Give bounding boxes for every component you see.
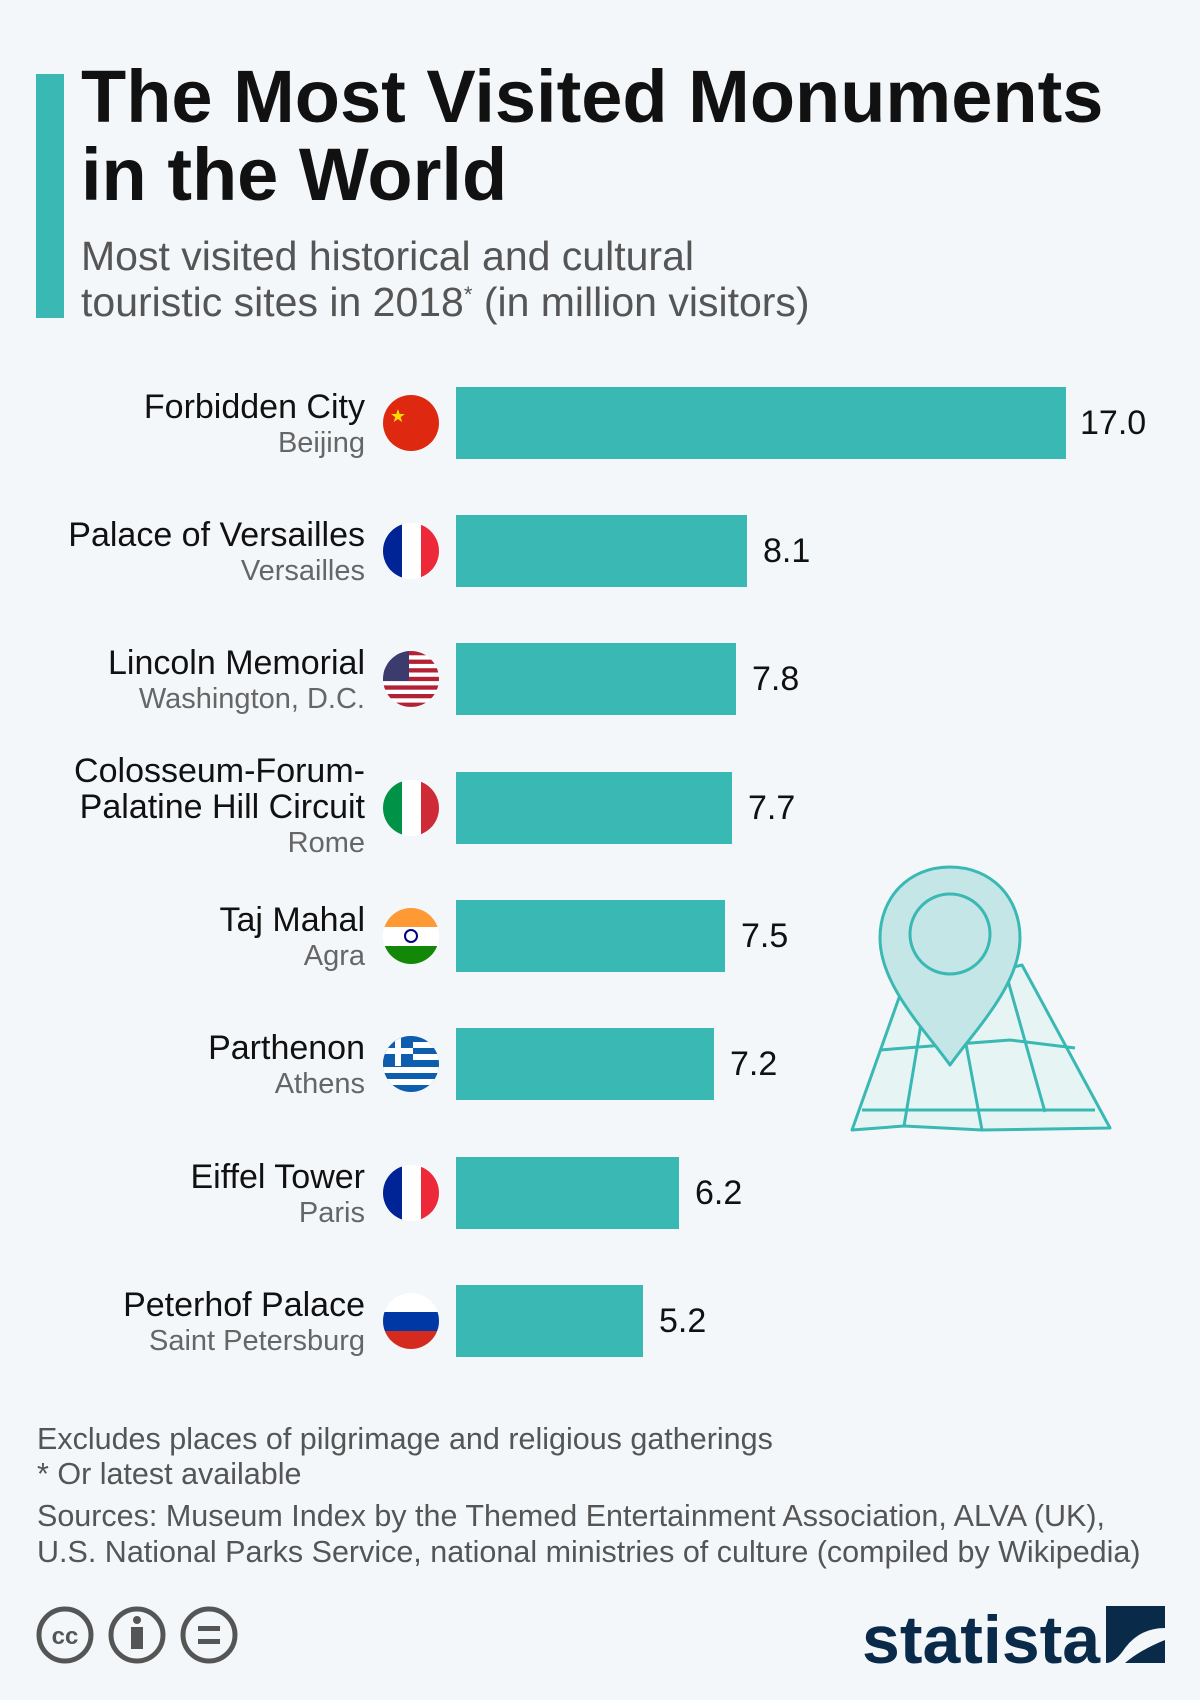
row: Lincoln Memorial: Lincoln Memorial (108, 644, 365, 682)
footer notes: * Or latest available (37, 1457, 301, 1491)
row: Eiffel Tower (190, 1157, 742, 1229)
row: Colosseum (76, 757, 794, 852)
row: Eiffel Tower: 6.2 (695, 1174, 742, 1212)
bar chart (68, 387, 1146, 1357)
row: Parthenon: Athens (275, 1068, 365, 1100)
row: Peterhof: 5.2 (659, 1302, 706, 1340)
row: Eiffel Tower: Paris (299, 1197, 365, 1229)
row: Versailles: 8.1 (763, 532, 810, 570)
row: Versailles: Versailles (241, 555, 365, 587)
row: Lincoln Memorial: 7.8 (752, 660, 799, 698)
row: Lincoln Memorial (108, 643, 799, 715)
row: Colosseum: Rome (288, 827, 365, 859)
footer notes: U.S. National Parks Service, national ministries of culture (compiled by Wikipedia) (37, 1535, 1141, 1569)
subtitle: * (464, 282, 473, 307)
footer notes: Sources: Museum Index by the Themed Entertainment Association, ALVA (UK), (37, 1499, 1105, 1533)
subtitle (81, 233, 810, 325)
row: Forbidden City: Forbidden City (144, 388, 365, 426)
title accent bar (36, 74, 64, 318)
row: Taj Mahal: Taj Mahal (219, 901, 365, 939)
row: Forbidden City: ★ (390, 406, 406, 426)
row: Forbidden City: Beijing (278, 427, 365, 459)
title: in the World (81, 133, 507, 216)
subtitle: touristic sites in 2018 (81, 279, 464, 325)
statista logo: statista (862, 1602, 1101, 1678)
title: The Most Visited Monuments (81, 55, 1103, 138)
row: Versailles: Palace of Versailles (68, 516, 365, 554)
row: Peterhof (123, 1285, 706, 1357)
row: Colosseum: Colosseum-Forum- (74, 752, 365, 790)
subtitle: (in million visitors) (472, 279, 810, 325)
row: Colosseum: Palatine Hill Circuit (80, 788, 366, 826)
license icons: cc (52, 1623, 78, 1650)
row: Parthenon: 7.2 (730, 1045, 777, 1083)
license icons (39, 1609, 235, 1661)
row: Taj Mahal: 7.5 (741, 917, 788, 955)
title (81, 55, 1103, 216)
row: Lincoln Memorial: Washington, D.C. (139, 683, 365, 715)
row: Colosseum: 7.7 (748, 789, 795, 827)
row: Taj Mahal (219, 900, 788, 972)
footer notes: Excludes places of pilgrimage and religious gatherings (37, 1422, 773, 1456)
row: Parthenon (208, 1028, 777, 1100)
footer notes (37, 1422, 1141, 1569)
row: Eiffel Tower: Eiffel Tower (190, 1158, 365, 1196)
row: Versailles (68, 515, 810, 587)
row: Peterhof: Saint Petersburg (149, 1325, 365, 1357)
row: Peterhof: Peterhof Palace (123, 1286, 365, 1324)
row: Parthenon: Parthenon (208, 1029, 365, 1067)
row: Taj Mahal: Agra (304, 940, 366, 972)
row: Forbidden City (144, 387, 1146, 459)
row: Forbidden City: 17.0 (1080, 404, 1146, 442)
icon: map with pin (852, 867, 1110, 1130)
subtitle: Most visited historical and cultural (81, 233, 694, 279)
